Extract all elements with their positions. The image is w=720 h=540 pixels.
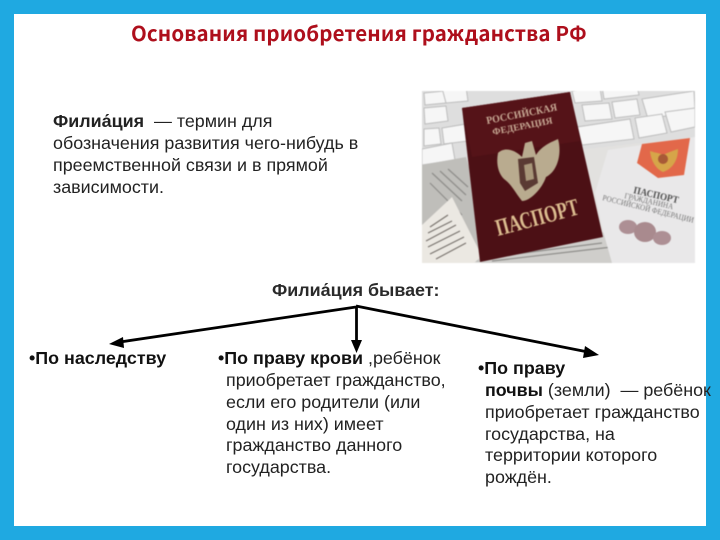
item: right of soil: приобретает гражданство: [485, 402, 700, 422]
keyboard: [422, 86, 695, 167]
passport booklet: РОССИЙСКАЯ: [485, 101, 559, 127]
definition text block: обозначения развития чего-нибудь в: [53, 133, 358, 153]
title: Основания приобретения гражданства РФ: [131, 17, 587, 47]
eagle emblem: [497, 139, 560, 201]
definition text block: [53, 111, 358, 197]
item: right of blood: один из них) имеет: [226, 414, 384, 434]
newspaper: [422, 157, 612, 263]
open passport page: [595, 137, 695, 263]
item: right of soil: [478, 358, 711, 487]
item: right of blood: если его родители (или: [226, 392, 420, 412]
item: right of blood: приобретает гражданство,: [226, 370, 446, 390]
arrow: left: [109, 307, 356, 348]
definition text block: зависимости.: [53, 177, 164, 197]
subheading: Филиа́ция бывает:: [272, 280, 439, 300]
item: by inheritance: •По наследству: [29, 348, 166, 368]
arrows: [109, 304, 599, 358]
item: right of blood: государства.: [226, 457, 331, 477]
arrow: right: [356, 306, 599, 358]
item: right of blood: [218, 348, 446, 477]
open passport page: ГРАЖДАНИНА: [624, 191, 674, 211]
open passport page: ПАСПОРТ: [632, 185, 680, 206]
passport booklet: ПАСПОРТ: [493, 195, 582, 242]
passport booklet: [462, 92, 603, 262]
definition text block: Филиа́ция — термин для: [53, 111, 272, 131]
item: right of soil: рождён.: [485, 467, 552, 487]
arrow: centre: [351, 306, 362, 353]
passport booklet: ФЕДЕРАЦИЯ: [492, 116, 554, 138]
item: right of soil: почвы (земли) — ребёнок: [485, 380, 711, 400]
item: right of blood: •По праву крови ,ребёнок: [218, 348, 440, 368]
item: right of soil: государства, на: [485, 424, 615, 444]
definition text block: преемственной связи и в прямой: [53, 155, 328, 175]
photo: Russian passport on a keyboard: [422, 90, 696, 264]
item: right of blood: гражданство данного: [226, 435, 402, 455]
item: right of soil: •По праву: [478, 358, 565, 378]
item: right of soil: территории которого: [485, 445, 657, 465]
